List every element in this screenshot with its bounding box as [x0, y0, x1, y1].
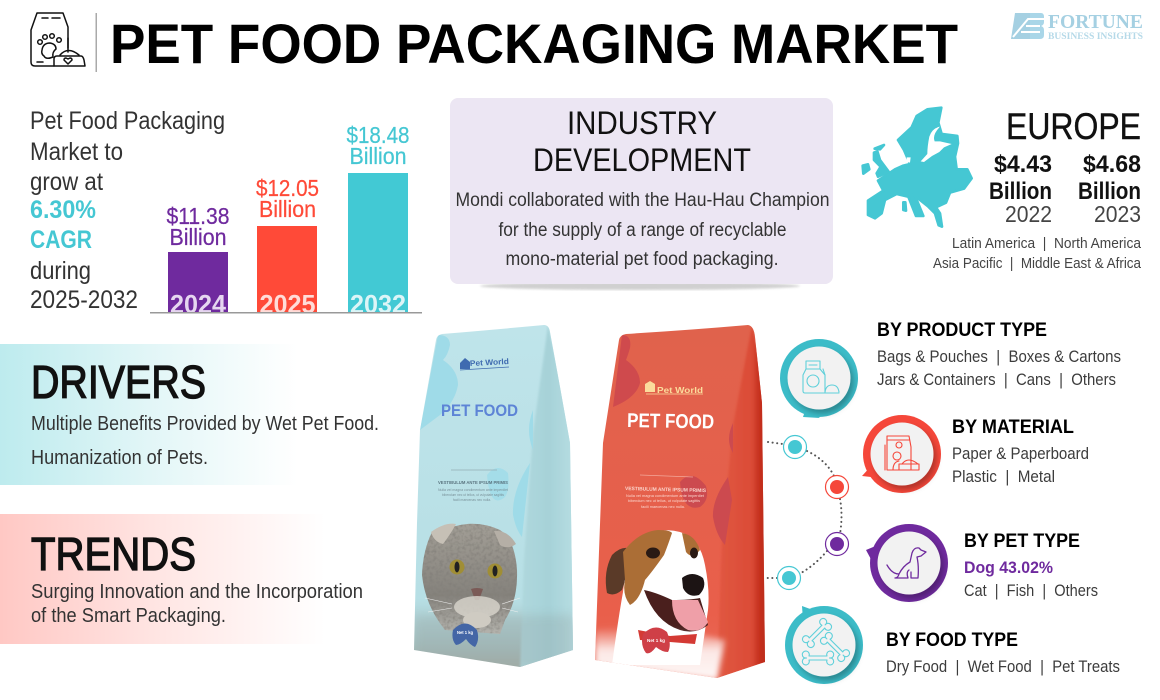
- blue pet food bag with cat: Nulla vel magna condimentum ante imperdiet: [438, 488, 508, 492]
- connector node: teal lower: [778, 566, 800, 590]
- segment: product type: [877, 319, 1121, 389]
- title: PET FOOD PACKAGING MARKET: [110, 12, 958, 75]
- market growth text: [30, 107, 225, 314]
- icon: pet type badge: [866, 524, 948, 602]
- panel: drivers: DRIVERS: [31, 356, 206, 408]
- icon: product type badge: [780, 339, 858, 418]
- bar 2024: [166, 203, 230, 319]
- icon: food type badge: [785, 606, 863, 684]
- logo: Fortune Business Insights: FORTUNE: [1048, 11, 1143, 33]
- panel: drivers: [0, 344, 379, 485]
- segment: material: Plastic | Metal: [952, 468, 1055, 486]
- segment: product type: Jars & Containers | Cans | Others: [877, 371, 1116, 389]
- Europe regional stats: Billion: [1078, 178, 1141, 205]
- bar 2032: [346, 122, 410, 319]
- bar 2025: 2025: [260, 289, 316, 319]
- segment: pet type: Dog 43.02%: [964, 559, 1053, 577]
- panel: trends: TRENDS: [31, 528, 196, 580]
- segment: material: Paper & Paperboard: [952, 445, 1089, 463]
- segment: pet type: BY PET TYPE: [964, 530, 1080, 552]
- blue pet food bag with cat: PET FOOD: [441, 401, 518, 420]
- segment: pet type: [964, 530, 1098, 600]
- panel: drivers: Multiple Benefits Provided by Wet Pet Food.: [31, 413, 379, 435]
- icon: material badge: [862, 415, 941, 493]
- bar 2024: 2024: [170, 289, 227, 319]
- panel: industry development: Mondi collaborated with the Hau-Hau Champion: [456, 190, 830, 211]
- Europe regional stats: 2023: [1094, 201, 1141, 227]
- dog face: [606, 530, 709, 665]
- bar 2032: Billion: [350, 143, 406, 169]
- bar 2025: [256, 175, 319, 319]
- bar 2032: 2032: [350, 289, 406, 319]
- market growth text: grow at: [30, 168, 103, 196]
- segment: pet type: Cat | Fish | Others: [964, 582, 1098, 600]
- Europe regional stats: [933, 106, 1142, 272]
- panel: industry development: [450, 98, 833, 290]
- bar 2024: Billion: [170, 224, 226, 250]
- logo: Fortune Business Insights: [1011, 11, 1143, 42]
- segment: product type: BY PRODUCT TYPE: [877, 319, 1047, 341]
- bar 2025: Billion: [259, 196, 316, 222]
- red pet food bag with dog: Net 1 kg: [647, 638, 665, 643]
- red pet food bag with dog: Pet World: [657, 385, 703, 395]
- segment: material: BY MATERIAL: [952, 416, 1074, 438]
- market growth text: during: [30, 257, 91, 285]
- Europe regional stats: EUROPE: [1006, 106, 1141, 147]
- red pet food bag with dog: VESTIBULUM ANTE IPSUM PRIMIS: [625, 486, 707, 494]
- red pet food bag with dog: [595, 325, 770, 680]
- panel: industry development: mono-material pet food packaging.: [506, 249, 778, 270]
- Europe regional stats: Billion: [989, 178, 1052, 205]
- Europe regional stats: 2022: [1005, 201, 1052, 227]
- Europe regional stats: $4.43: [994, 151, 1052, 178]
- bar 2024: $11.38: [166, 203, 230, 229]
- bar chart: [150, 122, 422, 320]
- market growth text: 2025-2032: [30, 286, 138, 314]
- header divider: [96, 13, 97, 72]
- segment: food type: [886, 629, 1120, 676]
- panel: trends: of the Smart Packaging.: [31, 605, 226, 627]
- connector node: red: [826, 476, 848, 498]
- panel: industry development: DEVELOPMENT: [533, 142, 751, 178]
- panel: trends: Surging Innovation and the Incorporation: [31, 581, 363, 603]
- Europe regional stats: $4.68: [1083, 151, 1141, 178]
- panel: trends: [0, 514, 363, 644]
- panel: industry development: for the supply of a range of recyclable: [498, 220, 786, 241]
- red pet food bag with dog: PET FOOD: [627, 410, 714, 434]
- logo: Fortune Business Insights: BUSINESS INSIGHTS: [1048, 32, 1143, 42]
- connector node: teal: [784, 436, 806, 458]
- segment: material: [952, 416, 1089, 486]
- panel: industry development: INDUSTRY: [567, 105, 717, 141]
- blue pet food bag with cat: Net 1 kg: [457, 630, 473, 635]
- market growth text: Pet Food Packaging: [30, 107, 225, 135]
- blue pet food bag with cat: Pet World: [470, 357, 509, 368]
- blue pet food bag with cat: bibendum nec ut tellus, ut vulputate sagittis: [442, 493, 504, 497]
- blue pet food bag with cat: facili maecenas nec nulla.: [453, 498, 491, 502]
- panel: drivers: Humanization of Pets.: [31, 447, 208, 469]
- bar 2025: $12.05: [256, 175, 319, 201]
- bar 2032: $18.48: [346, 122, 410, 148]
- map of Europe: [863, 108, 972, 227]
- red pet food bag with dog: Nulla vel magna condimentum ante imperdiet: [626, 494, 704, 498]
- segment: food type: BY FOOD TYPE: [886, 629, 1018, 651]
- Europe regional stats: Asia Pacific | Middle East & Africa: [933, 256, 1142, 272]
- market growth text: 6.30%: [30, 196, 96, 224]
- segment: food type: Dry Food | Wet Food | Pet Treats: [886, 658, 1120, 676]
- dotted connector arc: [767, 442, 842, 578]
- blue pet food bag with cat: VESTIBULUM ANTE IPSUM PRIMIS: [438, 480, 508, 485]
- red pet food bag with dog: facili maecenas nec nulla.: [641, 505, 685, 509]
- connector node: purple: [826, 532, 848, 556]
- cat face: [422, 524, 520, 634]
- market growth text: CAGR: [30, 226, 92, 254]
- segment: product type: Bags & Pouches | Boxes & Cartons: [877, 348, 1121, 366]
- header icon: pet food bag and bowl: [31, 13, 85, 66]
- market growth text: Market to: [30, 138, 123, 166]
- red pet food bag with dog: bibendum nec ut tellus, ut vulputate sagittis: [628, 499, 700, 503]
- Europe regional stats: Latin America | North America: [952, 236, 1142, 252]
- blue pet food bag with cat: [414, 325, 578, 670]
